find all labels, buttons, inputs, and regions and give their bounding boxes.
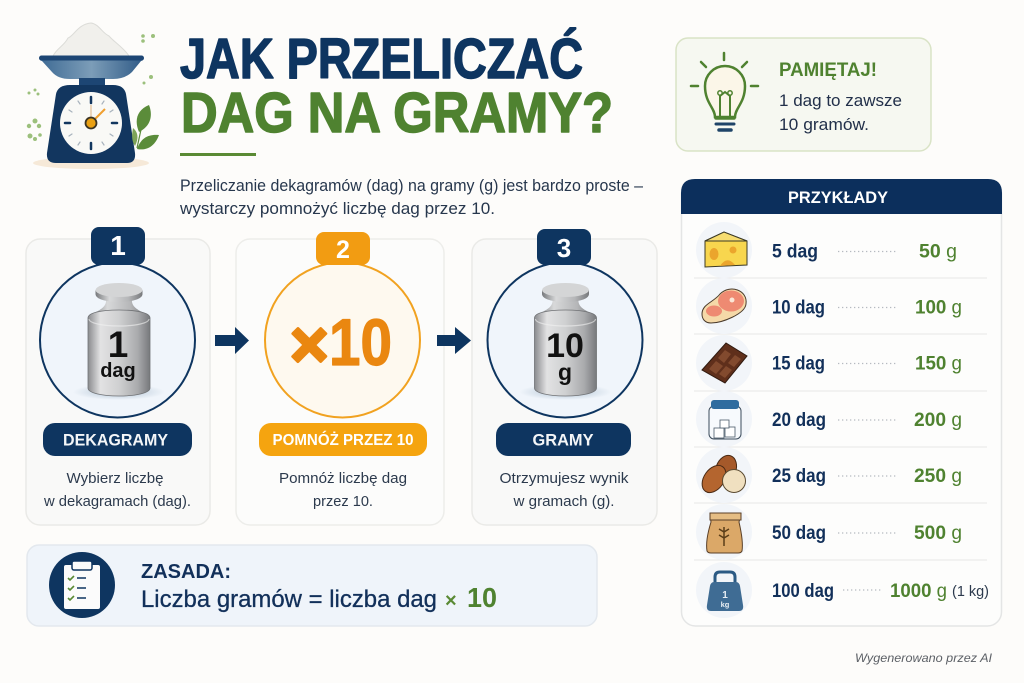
examples header xyxy=(681,179,1002,214)
step 3 description xyxy=(500,471,629,510)
row: 100 dag: 100 dag xyxy=(772,581,834,602)
step 2 badge xyxy=(316,232,370,265)
row: 20 dag: 20 dag xyxy=(772,410,826,431)
row: 20 dag: 200 g xyxy=(914,409,962,431)
weight 10 g: 10 xyxy=(546,327,584,365)
intro text: wystarczy pomnożyć liczbę dag przez 10. xyxy=(179,200,495,218)
label pill pomnoz przez 10 xyxy=(259,423,427,456)
icon: 1 kg weight: 1 xyxy=(722,590,728,601)
callout text: 10 gramów. xyxy=(779,115,869,134)
step 3 description: w gramach (g). xyxy=(512,494,614,510)
callout heading: PAMIĘTAJ! xyxy=(779,60,877,81)
icon: kitchen scale with flour xyxy=(27,23,159,169)
icon: light bulb xyxy=(691,53,758,130)
row: 25 dag: 250 g xyxy=(914,465,962,487)
step 1 description: Wybierz liczbę xyxy=(66,471,164,487)
weight 10 g xyxy=(520,283,612,400)
rule formula: × xyxy=(445,590,457,612)
label pill dekagramy xyxy=(43,423,192,456)
panel: step 3 gramy xyxy=(472,229,657,525)
icon: steak xyxy=(702,289,746,323)
step 3 badge xyxy=(537,229,591,265)
row: 100 dag: 1000 g xyxy=(890,580,947,602)
panel: step 1 dekagramy xyxy=(26,227,210,525)
rule heading: ZASADA: xyxy=(141,561,231,583)
row: 10 dag: 10 dag xyxy=(772,298,825,318)
title: JAK PRZELICZAĆ xyxy=(180,27,583,91)
step 2 circle xyxy=(265,262,420,418)
weight 10 g: g xyxy=(558,359,572,385)
step 1 badge xyxy=(91,227,145,265)
row: 5 dag: 5 dag xyxy=(772,242,818,262)
step 3 description: Otrzymujesz wynik xyxy=(500,471,629,487)
label pill pomnoz przez 10: POMNÓŻ PRZEZ 10 xyxy=(272,431,414,449)
rule formula: Liczba gramów = liczba dag xyxy=(141,586,437,613)
intro text: Przeliczanie dekagramów (dag) na gramy (g) jest bardzo proste – xyxy=(180,177,644,195)
step 2 description: Pomnóż liczbę dag xyxy=(279,471,407,487)
row: 10 dag: 100 g xyxy=(915,296,962,318)
times 10: 10 xyxy=(329,305,392,379)
row: 5 dag xyxy=(705,232,957,267)
row: 25 dag: 25 dag xyxy=(772,466,826,487)
icon: chocolate xyxy=(702,343,747,383)
icon: cheese xyxy=(705,232,747,267)
step 2 description xyxy=(279,471,407,510)
title xyxy=(180,27,613,145)
panel: przyklady examples xyxy=(681,179,1002,626)
times 10: × xyxy=(290,307,329,381)
callout text: 1 dag to zawsze xyxy=(779,91,902,110)
footer credit: Wygenerowano przez AI xyxy=(855,653,993,665)
panel: zasada rule xyxy=(27,545,597,626)
step 1 description: w dekagramach (dag). xyxy=(43,494,191,510)
callout text xyxy=(779,91,902,134)
row: 50 dag: 50 dag xyxy=(772,523,826,544)
row: 20 dag xyxy=(709,400,962,439)
step 1 circle xyxy=(40,262,195,418)
rule formula: 10 xyxy=(467,582,497,613)
times 10 xyxy=(290,305,392,381)
icon: 1 kg weight: kg xyxy=(721,600,730,609)
label pill dekagramy: DEKAGRAMY xyxy=(63,432,168,450)
title: DAG NA GRAMY? xyxy=(181,81,613,145)
intro text xyxy=(179,177,644,218)
row: 5 dag: 50 g xyxy=(919,240,957,262)
row: 15 dag: 150 g xyxy=(915,352,962,374)
icon: jar of sugar xyxy=(709,400,741,439)
row: 15 dag xyxy=(702,343,962,383)
row: 100 dag: (1 kg) xyxy=(952,583,989,600)
weight 1 dag: 1 xyxy=(108,324,128,365)
weight 1 dag xyxy=(73,283,165,400)
row: 50 dag: 500 g xyxy=(914,522,962,544)
step 3 circle xyxy=(488,262,642,418)
icon: flour sack xyxy=(707,513,742,553)
arrow 1 xyxy=(215,327,249,354)
weight 1 dag: dag xyxy=(100,360,136,382)
examples header: PRZYKŁADY xyxy=(788,189,888,207)
row: 50 dag xyxy=(707,513,962,553)
step 1 badge: 1 xyxy=(110,230,126,261)
label pill gramy: GRAMY xyxy=(532,432,594,450)
panel: step 2 pomnoz xyxy=(236,232,444,525)
step 3 badge: 3 xyxy=(557,233,571,263)
row: 25 dag xyxy=(697,452,962,497)
step 2 badge: 2 xyxy=(336,236,350,264)
row: 10 dag xyxy=(702,289,962,323)
row: 100 dag xyxy=(707,572,989,611)
arrow 2 xyxy=(437,327,471,354)
step 1 description xyxy=(43,471,191,510)
icon: clipboard checklist xyxy=(49,552,115,618)
icon: 1 kg weight xyxy=(707,572,743,611)
panel: pamietaj callout xyxy=(676,38,931,151)
label pill gramy xyxy=(496,423,631,456)
step 2 description: przez 10. xyxy=(313,494,373,510)
icon: nuts xyxy=(697,452,746,497)
row: 15 dag: 15 dag xyxy=(772,354,825,374)
